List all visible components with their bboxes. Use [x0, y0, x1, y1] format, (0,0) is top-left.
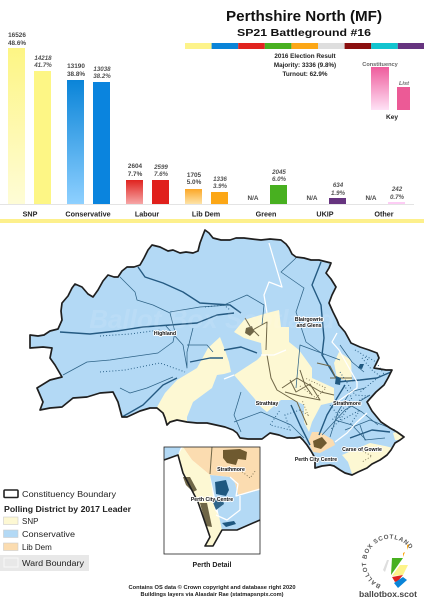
bars: Green: N/A: [247, 195, 259, 202]
bars: SNP: 16526: [8, 32, 26, 39]
logo: Ballot Box Scotland: ballotbox.scot: [359, 589, 417, 599]
legend: Lib Dem: Lib Dem: [22, 543, 52, 552]
bars: Labour: [126, 163, 169, 204]
bars: Labour: 7.7%: [128, 171, 143, 178]
bars: Labour: 7.6%: [154, 171, 169, 178]
bars: Conservative: 13190: [67, 63, 85, 70]
key: Key: [386, 114, 398, 121]
map legend: [0, 490, 131, 571]
party labels: UKIP: [316, 210, 334, 218]
bars: SNP: 14218: [34, 55, 52, 62]
ward boundaries: [224, 243, 367, 442]
bars: Green: [247, 169, 287, 204]
bars: UKIP: N/A: [306, 195, 318, 202]
inset labels: Strathmore: [217, 467, 245, 473]
bars: UKIP: 1.9%: [331, 190, 346, 197]
legend: SNP: SNP: [22, 517, 38, 526]
yellow divider band: [0, 219, 424, 223]
inset ward line: [230, 477, 260, 496]
legend: Conservative: Conservative: [22, 530, 76, 539]
bars: Conservative: 38.8%: [67, 71, 85, 78]
bars: SNP: 41.7%: [33, 62, 52, 69]
bars: SNP: 48.6%: [8, 40, 26, 47]
bars: Other: N/A: [365, 195, 377, 202]
bars: Labour: 2599: [153, 164, 168, 171]
bars: Lib Dem: 1336: [213, 176, 227, 183]
title: Perthshire North (MF): [226, 9, 382, 25]
election result text: Majority: 3336 (9.8%): [274, 62, 336, 69]
key: Constituency: [362, 62, 399, 68]
inset boundary: [164, 455, 260, 546]
inset map: Perth detail: Perth City Centre: [191, 497, 233, 503]
bars: Lib Dem: 3.9%: [213, 183, 228, 190]
map labels: Highland: [154, 331, 176, 337]
map labels: Perth City Centre: [295, 457, 337, 463]
election result text: 2016 Election Result: [274, 53, 337, 60]
party labels: Lib Dem: [192, 210, 220, 218]
bars: Other: 0.7%: [390, 194, 405, 201]
SNP areas: [157, 310, 404, 474]
bars: Conservative: 13038: [93, 66, 111, 73]
map labels: Strathmore: [333, 401, 361, 407]
map labels: [154, 317, 382, 463]
party labels: SNP: [23, 210, 38, 218]
map labels: Carse of Gowrie: [342, 447, 382, 453]
legend: constituency boundary: Constituency Boundary: [22, 490, 116, 499]
bars: Green: 6.0%: [272, 176, 287, 183]
bars: Lib Dem: [185, 172, 228, 204]
party labels: Green: [256, 210, 276, 218]
key: [362, 62, 410, 121]
map labels: Strathtay: [256, 401, 278, 407]
credits: Contains OS data © Crown copyright and database right 2020: [128, 584, 296, 591]
map labels: Blairgowrie: [295, 317, 323, 323]
bars: Lib Dem: 5.0%: [187, 179, 202, 186]
bars: Lib Dem: 1705: [187, 172, 202, 179]
map labels: and Glens: [296, 323, 322, 329]
inset buildings: [183, 447, 256, 527]
party labels: Conservative: [65, 210, 111, 218]
party labels: Labour: [135, 210, 159, 218]
bar chart: [0, 32, 414, 218]
conservative base area: [30, 230, 404, 475]
credits: Buildings layers via Alasdair Rae (statmapsnpix.com): [140, 592, 284, 598]
bars: UKIP: [306, 182, 346, 204]
bars: UKIP: 634: [333, 182, 344, 189]
election result text: Turnout: 62.9%: [282, 71, 328, 78]
key: List: [399, 81, 410, 87]
bars: Conservative: [67, 63, 111, 204]
bars: Labour: 2604: [128, 163, 143, 170]
legend: ward boundary: Ward Boundary: [22, 559, 84, 568]
watermark: Ballot Box Scotland: [89, 304, 336, 334]
title: SP21 Battleground #16: [237, 27, 371, 39]
bars: Green: 2045: [271, 169, 286, 176]
credits: [128, 584, 296, 598]
bars: Conservative: 38.2%: [93, 73, 111, 80]
legend heading: Polling District by 2017 Leader: [4, 505, 131, 514]
logo: Ballot Box Scotland: BALLOT BOX SCOTLAND: [362, 534, 412, 589]
Lib Dem area: [308, 432, 335, 453]
title: [226, 9, 382, 39]
party colour strip: [185, 43, 424, 49]
party labels: [23, 210, 394, 218]
inset map: Perth detail: [164, 447, 260, 569]
party labels: Other: [374, 210, 394, 218]
election result text: [274, 53, 337, 78]
constituency map: [30, 230, 404, 475]
bars: Other: 242: [391, 186, 403, 193]
roads and settlements: [60, 258, 395, 462]
inset caption: Perth Detail: [193, 562, 232, 569]
constituency outline: [30, 230, 404, 475]
bars: SNP: [8, 32, 52, 204]
bars: Other: [365, 186, 405, 204]
